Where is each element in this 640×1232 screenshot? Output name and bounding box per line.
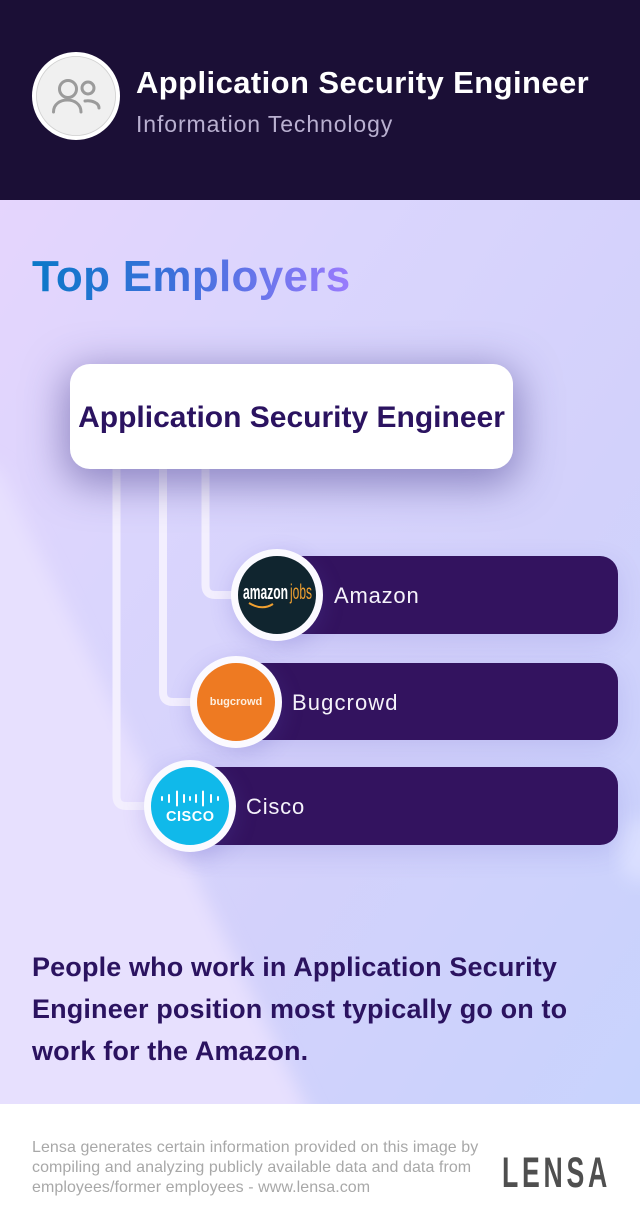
- logo: Bugcrowd: [190, 656, 282, 748]
- disclaimer text: Lensa generates certain information provided on this image by: [32, 1139, 478, 1156]
- disclaimer text: employees/former employees - www.lensa.com: [32, 1179, 370, 1196]
- logo: LENSA: LENSA: [502, 1149, 611, 1197]
- icon: people avatar: [32, 52, 120, 140]
- employer bar: Bugcrowd: [236, 663, 618, 740]
- logo: Cisco: [144, 760, 236, 852]
- employer bar: Cisco: Cisco: [246, 794, 305, 819]
- main panel: top employers: [0, 200, 640, 1104]
- header title: Application Security Engineer: [136, 65, 589, 100]
- central role box: Application Security Engineer: [78, 401, 505, 434]
- employer bar: Amazon: Amazon: [334, 583, 420, 608]
- connector lines: [112, 469, 232, 810]
- employer bar: Bugcrowd: Bugcrowd: [292, 690, 399, 715]
- summary text: Engineer position most typically go on to: [32, 994, 567, 1024]
- employer row: Bugcrowd: [182, 654, 622, 764]
- central role box: [70, 364, 513, 469]
- employer bar: Cisco: [190, 767, 618, 845]
- header subtitle: Information Technology: [136, 111, 393, 137]
- employer bar: Amazon: [277, 556, 618, 634]
- disclaimer text: [32, 1139, 478, 1196]
- disclaimer text: compiling and analyzing publicly available data and data from: [32, 1159, 471, 1176]
- heading: Top Employers: Top Employers: [32, 252, 350, 301]
- logo: Amazon Jobs: [231, 549, 323, 641]
- logo: Amazon Jobs: amazon: [243, 582, 288, 604]
- header band: [0, 0, 640, 200]
- footer: [0, 1104, 640, 1232]
- summary text: [32, 952, 567, 1066]
- logo: Cisco: CISCO: [166, 809, 214, 825]
- summary text: People who work in Application Security: [32, 952, 557, 982]
- employer row: Amazon: [224, 547, 622, 656]
- summary text: work for the Amazon.: [32, 1036, 308, 1066]
- logo: Bugcrowd: bugcrowd: [210, 696, 262, 708]
- employer row: Cisco: [136, 758, 622, 867]
